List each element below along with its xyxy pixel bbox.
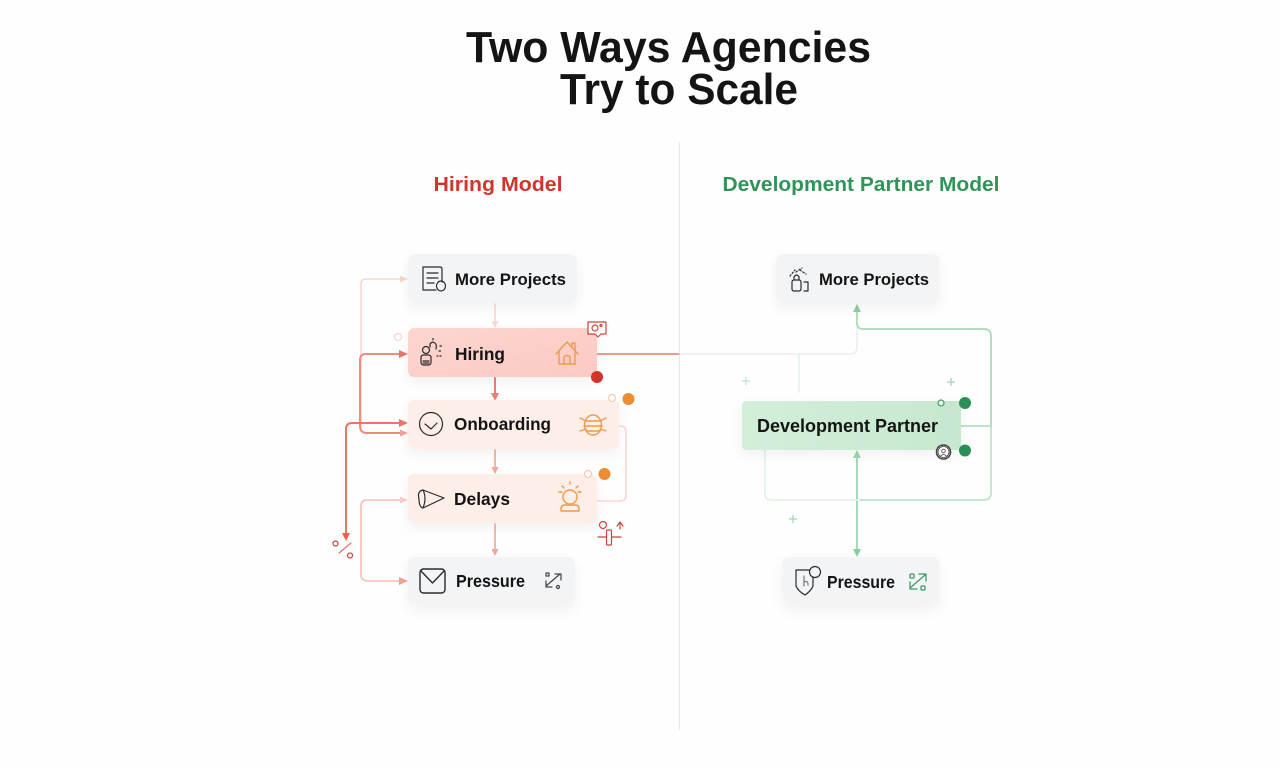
node: Hiring — [408, 328, 597, 377]
center divider — [678, 142, 680, 730]
icon: green expand arrows — [910, 574, 926, 590]
icon: team — [790, 268, 808, 291]
status dots: delays — [584, 468, 610, 480]
status dot: hiring — [591, 371, 603, 383]
icon: megaphone — [418, 490, 444, 508]
title — [466, 23, 871, 114]
icon: bug — [580, 415, 606, 435]
icon: percent mark — [333, 541, 352, 558]
node: Delays — [408, 474, 597, 523]
node: Pressure (hiring) — [408, 557, 575, 605]
node: Development Partner: Development Partner — [757, 415, 938, 436]
heading: Hiring Model: Hiring Model — [434, 174, 562, 196]
node: Onboarding: Onboarding — [454, 414, 551, 434]
icon: house — [556, 342, 578, 364]
node: More Projects (hiring): More Projects — [455, 270, 566, 289]
node: More Projects (partner) — [776, 254, 939, 303]
node: Pressure (partner): Pressure — [827, 572, 895, 592]
node: Pressure (partner) — [782, 557, 939, 605]
node: Development Partner — [742, 401, 961, 450]
title: Two Ways Agencies — [466, 23, 871, 72]
icon: expand arrows — [546, 573, 561, 588]
status dots: development partner — [938, 397, 971, 456]
node: Onboarding — [408, 400, 619, 449]
icon: envelope — [420, 569, 445, 593]
status dots: onboarding — [608, 393, 634, 405]
icon: people — [421, 338, 442, 365]
icon: badge near hiring — [588, 322, 606, 337]
icon: document — [423, 267, 446, 291]
icon: adjuster — [598, 522, 623, 545]
heading: Development Partner Model: Development Partner Model — [722, 174, 1000, 196]
node: More Projects (partner): More Projects — [819, 270, 929, 289]
plus marks — [742, 377, 955, 523]
node: Delays: Delays — [454, 489, 510, 509]
node: Pressure (hiring): Pressure — [456, 571, 525, 591]
icon: shield — [796, 566, 820, 595]
icon: person with rays — [559, 482, 581, 511]
hollow marker: hiring — [394, 334, 402, 340]
connectors: hiring model — [342, 276, 679, 585]
icon: gear — [936, 445, 950, 459]
node: More Projects (hiring) — [408, 254, 577, 303]
node: Hiring: Hiring — [455, 344, 505, 364]
title: Try to Scale — [560, 65, 798, 114]
icon: check circle — [420, 412, 442, 436]
connectors: development partner model — [680, 304, 991, 557]
